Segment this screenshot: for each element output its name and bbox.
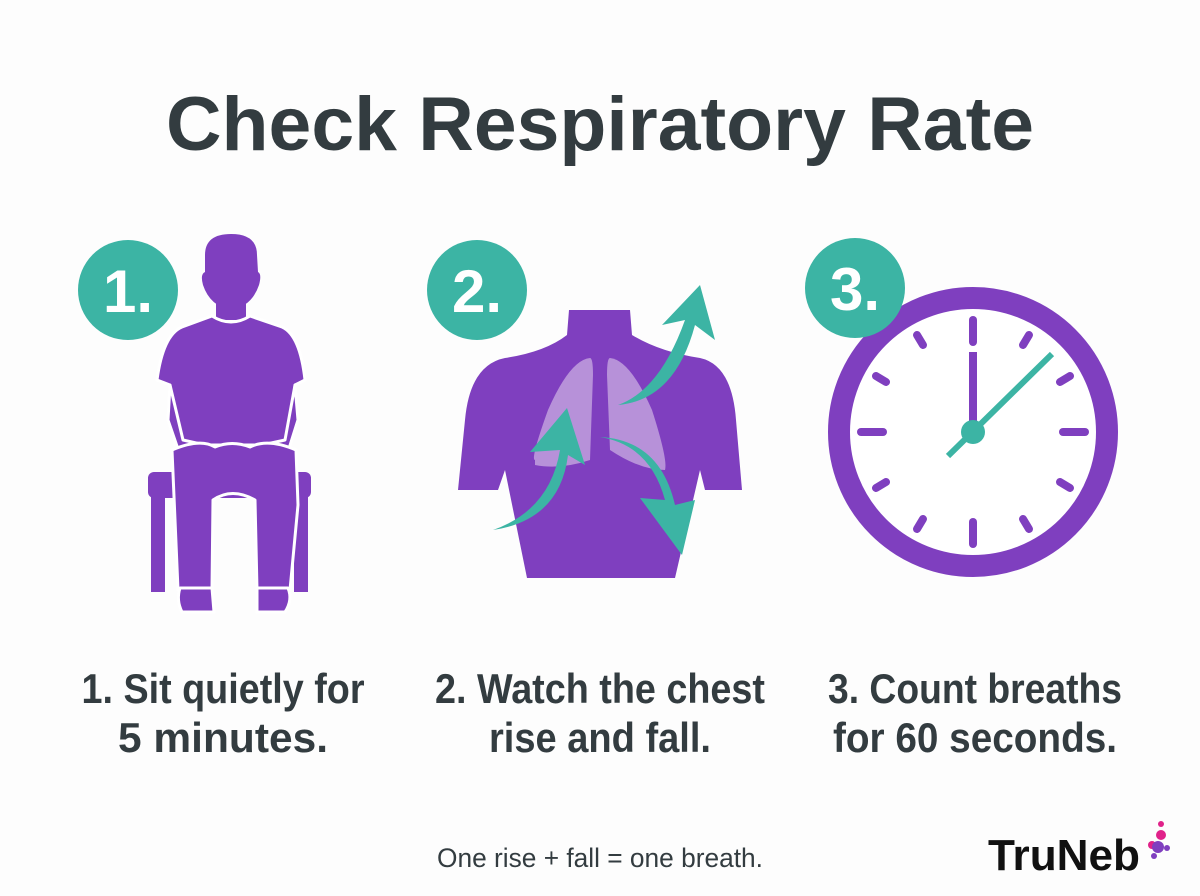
footer note: One rise + fall = one breath. [437,843,763,873]
title: Check Respiratory Rate [166,82,1034,167]
badge 1: 1. [103,258,153,325]
arrow: down right [600,437,695,555]
icon: seated person [148,234,311,612]
badge 1 [78,240,178,340]
step 1 text: 1. Sit quietly for [82,665,364,712]
panel: step 2: rise and fall. [489,714,711,761]
arrow: up right [618,285,715,405]
panel: step 3 [805,238,1122,761]
step 2 text: 2. Watch the chest [435,665,765,712]
panel: step 3: for 60 seconds. [833,714,1117,761]
arrow: up left [493,408,585,530]
panel: step 1 [78,234,364,761]
badge 2 [427,240,527,340]
logo: TruNeb: TruNeb [988,831,1140,880]
logo: TruNeb [988,821,1170,880]
panel: step 1: 5 minutes. [118,714,328,761]
icon: torso with lungs [458,285,742,578]
step 3 text: 3. Count breaths [828,665,1122,712]
badge 3: 3. [830,256,880,323]
badge 2: 2. [452,258,502,325]
icon: clock [839,298,1107,566]
panel: step 2 [427,240,765,761]
badge 3 [805,238,905,338]
